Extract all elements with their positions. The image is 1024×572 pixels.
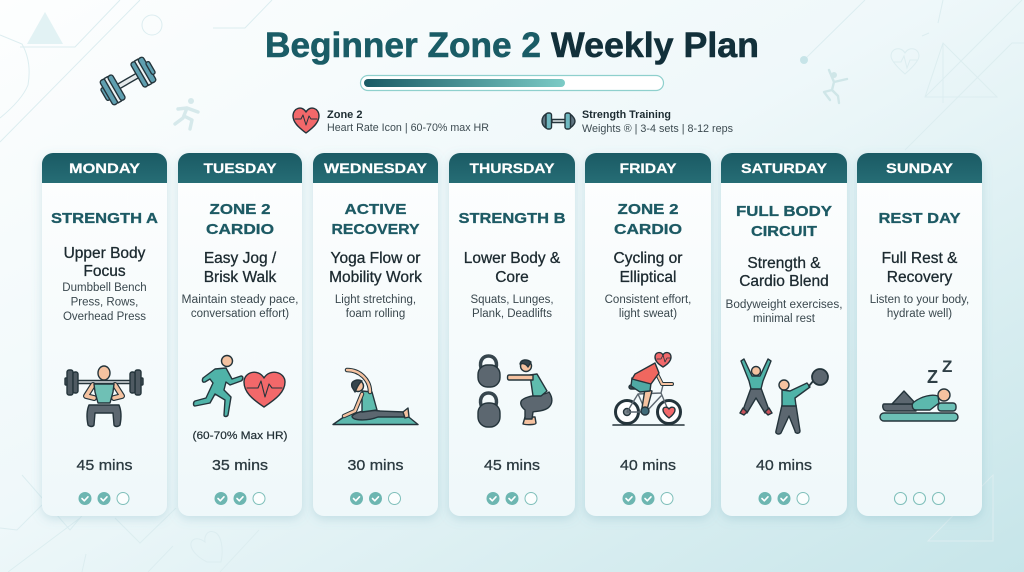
- monday details: Overhead Press: [63, 311, 146, 323]
- sunday details: [870, 294, 969, 320]
- friday workout title: [614, 201, 682, 238]
- progress bar: [360, 76, 664, 90]
- icon: legend dumbbell: [542, 113, 575, 129]
- thursday details: [470, 294, 554, 320]
- wednesday focus: [329, 250, 422, 286]
- tuesday focus: Easy Jog /: [204, 250, 277, 267]
- saturday header: SATURDAY: [741, 160, 828, 176]
- thursday workout title: STRENGTH B: [458, 210, 566, 227]
- sunday header: SUNDAY: [886, 160, 954, 176]
- wednesday duration: 30 mins: [348, 457, 404, 474]
- icon: sleep letters: Z: [927, 367, 938, 387]
- tuesday details: Maintain steady pace,: [182, 294, 298, 306]
- saturday header: [721, 153, 847, 183]
- tuesday header: [178, 153, 302, 183]
- friday header: [585, 153, 711, 183]
- monday workout title: STRENGTH A: [51, 210, 158, 227]
- tuesday workout title: ZONE 2: [210, 201, 270, 218]
- friday details: [605, 294, 691, 320]
- legend: zone 2: [293, 108, 489, 134]
- panel: friday: [585, 153, 711, 516]
- friday focus: Elliptical: [620, 269, 676, 286]
- wednesday workout title: RECOVERY: [332, 221, 420, 238]
- monday details: Dumbbell Bench: [62, 282, 147, 294]
- tuesday duration: 35 mins: [212, 457, 268, 474]
- sunday header: [857, 153, 982, 183]
- sunday details: Listen to your body,: [870, 294, 969, 306]
- monday focus: Upper Body: [64, 245, 146, 262]
- legend: zone 2: Heart Rate Icon | 60-70% max HR: [327, 122, 489, 134]
- tuesday intensity dots: [214, 492, 265, 505]
- title: [265, 26, 759, 65]
- saturday intensity dots: [758, 492, 809, 505]
- thursday intensity dots: [486, 492, 537, 505]
- panel: tuesday: [178, 153, 302, 516]
- icon: person sleeping: [880, 389, 958, 421]
- wednesday focus: Yoga Flow or: [331, 250, 420, 267]
- wednesday details: Light stretching,: [335, 294, 416, 306]
- wednesday details: foam rolling: [346, 308, 405, 320]
- thursday header: [449, 153, 575, 183]
- tuesday workout title: CARDIO: [206, 221, 274, 238]
- tuesday workout title: [206, 201, 274, 238]
- title: Beginner Zone 2: [265, 26, 541, 65]
- title: Weekly Plan: [551, 26, 759, 65]
- monday details: [62, 282, 147, 323]
- saturday workout title: [736, 203, 832, 240]
- icon: yoga stretch: [333, 370, 418, 424]
- icon: runner and heart: [194, 356, 285, 416]
- thursday details: Plank, Deadlifts: [472, 308, 552, 320]
- friday workout title: CARDIO: [614, 221, 682, 238]
- sunday details: hydrate well): [887, 308, 952, 320]
- saturday duration: 40 mins: [756, 457, 812, 474]
- icon: legend heart: [293, 108, 319, 133]
- wednesday intensity dots: [350, 492, 400, 505]
- tuesday focus: [204, 250, 277, 286]
- icon: barbell squat: [65, 366, 143, 426]
- thursday header: THURSDAY: [470, 160, 555, 176]
- monday intensity dots: [78, 492, 129, 505]
- monday duration: 45 mins: [76, 457, 132, 474]
- legend: strength training: [542, 109, 733, 135]
- tuesday details: conversation effort): [191, 308, 289, 320]
- sunday focus: Recovery: [887, 269, 952, 286]
- thursday focus: Lower Body &: [464, 250, 561, 267]
- monday focus: [64, 245, 146, 280]
- sunday focus: [882, 250, 958, 286]
- panel: sunday: [857, 153, 982, 516]
- icon: cyclist: [613, 353, 684, 425]
- monday focus: Focus: [83, 263, 126, 280]
- wednesday header: [313, 153, 438, 183]
- saturday details: Bodyweight exercises,: [726, 299, 842, 311]
- friday duration: 40 mins: [620, 457, 676, 474]
- monday header: [42, 153, 167, 183]
- legend: zone 2: Zone 2: [327, 109, 362, 121]
- saturday details: [726, 299, 842, 325]
- thursday details: Squats, Lunges,: [470, 294, 554, 306]
- tuesday details: [182, 294, 298, 320]
- icon: sleep letters: Z: [942, 357, 952, 376]
- tuesday focus: Brisk Walk: [204, 269, 277, 286]
- icon: dumbbell: [97, 55, 159, 107]
- wednesday details: [335, 294, 416, 320]
- thursday focus: Core: [495, 269, 529, 286]
- friday details: Consistent effort,: [605, 294, 691, 306]
- friday focus: Cycling or: [614, 250, 682, 267]
- tuesday heart rate note: (60-70% Max HR): [192, 430, 288, 442]
- wednesday workout title: ACTIVE: [344, 201, 406, 218]
- friday focus: [614, 250, 682, 286]
- panel: saturday: [721, 153, 847, 516]
- saturday focus: Cardio Blend: [739, 273, 829, 290]
- saturday details: minimal rest: [753, 313, 816, 325]
- thursday duration: 45 mins: [484, 457, 540, 474]
- icon: sleep letters: [927, 357, 952, 387]
- monday details: Press, Rows,: [71, 296, 138, 308]
- icon: jumping jack and kettlebell swing: [740, 359, 828, 434]
- saturday workout title: CIRCUIT: [751, 223, 817, 240]
- friday details: light sweat): [619, 308, 677, 320]
- legend: strength training: Strength Training: [582, 109, 671, 121]
- wednesday header: WEDNESDAY: [324, 160, 428, 176]
- wednesday focus: Mobility Work: [329, 269, 422, 286]
- panel: monday: [42, 153, 167, 516]
- wednesday workout title: [332, 201, 420, 238]
- saturday focus: Strength &: [747, 255, 821, 272]
- friday intensity dots: [622, 492, 673, 505]
- panel: wednesday: [313, 153, 438, 516]
- legend: strength training: Weights ® | 3-4 sets | 8-12 reps: [582, 123, 733, 135]
- friday header: FRIDAY: [620, 160, 677, 176]
- saturday workout title: FULL BODY: [736, 203, 832, 220]
- icon: kettlebells and squat: [478, 356, 552, 427]
- monday header: MONDAY: [69, 160, 141, 176]
- friday workout title: ZONE 2: [618, 201, 678, 218]
- sunday focus: Full Rest &: [882, 250, 958, 267]
- sunday intensity dots: [894, 492, 944, 504]
- sunday workout title: REST DAY: [878, 210, 960, 227]
- tuesday header: TUESDAY: [204, 160, 277, 176]
- saturday focus: [739, 255, 829, 290]
- thursday focus: [464, 250, 561, 286]
- panel: thursday: [449, 153, 575, 516]
